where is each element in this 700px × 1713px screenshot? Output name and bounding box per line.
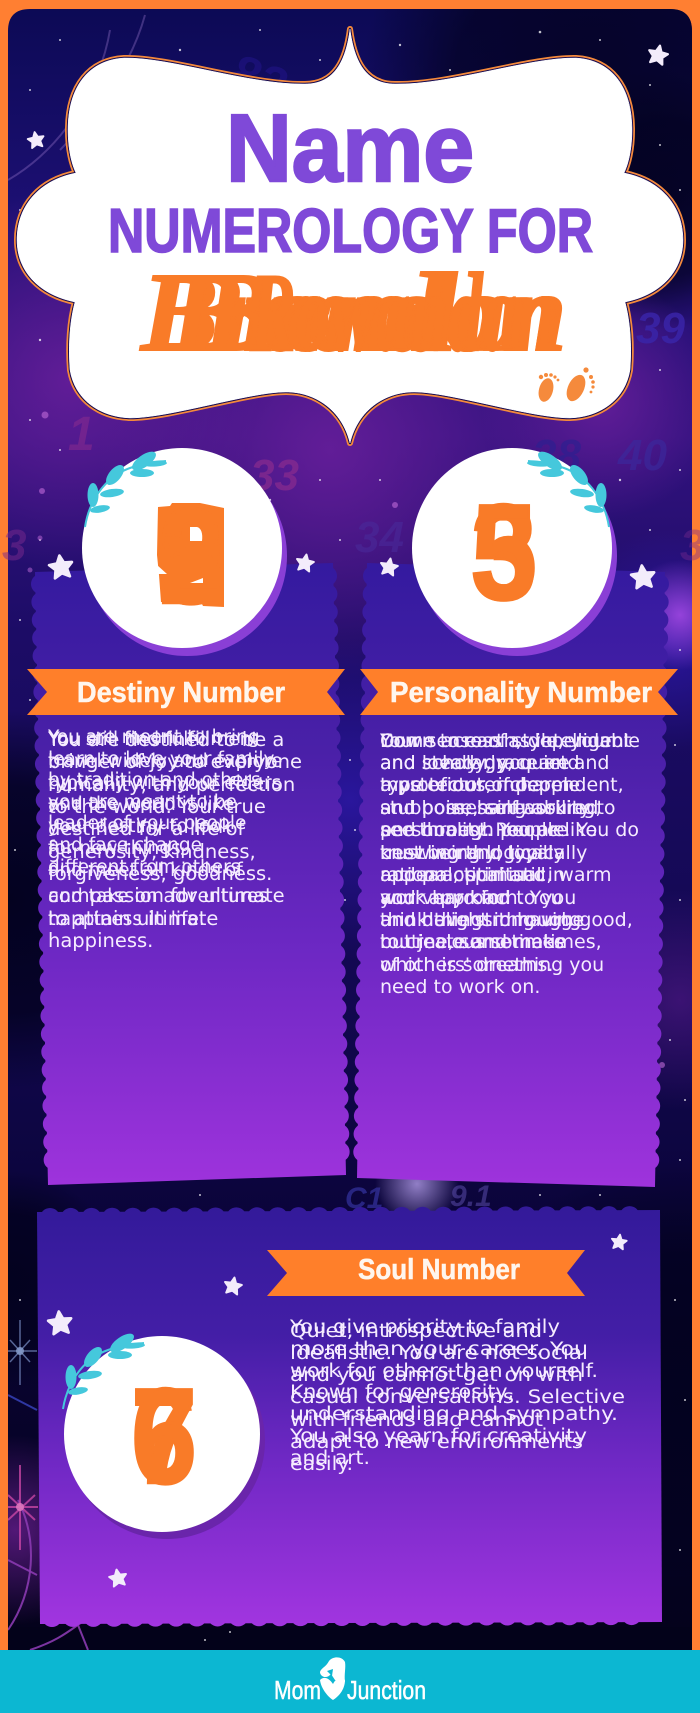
star upper right bbox=[611, 1234, 627, 1250]
overlapping destiny text: You are meant to bring bbox=[47, 727, 260, 748]
overlapping destiny text: and face change bbox=[48, 835, 202, 856]
overlapping baby names: Brennan bbox=[170, 251, 562, 375]
overlapping personality text: need to work on. bbox=[380, 976, 540, 998]
overlapping soul text bbox=[289, 1317, 625, 1475]
ribbon: personality number bbox=[360, 669, 678, 715]
icon: baby footprints bbox=[536, 367, 595, 404]
overlapping soul text: Known for generosity, bbox=[290, 1382, 514, 1403]
logo wordmark bbox=[274, 1675, 426, 1705]
faint background numerals bbox=[2, 43, 700, 1215]
overlapping personality text: type of outer charm bbox=[380, 774, 570, 796]
panel: personality number bbox=[357, 448, 678, 1187]
star: title right bbox=[647, 44, 669, 65]
overlapping personality text: a protector of people bbox=[380, 774, 580, 796]
panel background bbox=[35, 563, 346, 1185]
overlapping personality text: but jealous sometimes, bbox=[380, 931, 602, 953]
plaque outline bbox=[17, 29, 683, 443]
overlapping personality text: best being logically bbox=[380, 842, 564, 864]
panel: soul number bbox=[37, 1210, 662, 1624]
overlapping destiny text: and the world is like bbox=[48, 794, 234, 815]
panel: destiny number bbox=[27, 448, 346, 1185]
star upper middle bbox=[223, 1276, 243, 1295]
overlapping destiny text: different from others bbox=[48, 857, 240, 878]
overlapping soul digits: 6 bbox=[131, 1360, 197, 1512]
overlapping destiny text bbox=[47, 727, 302, 952]
icon: leaf branch bbox=[63, 1330, 145, 1409]
overlapping destiny text: typically with your elders bbox=[48, 773, 281, 794]
overlapping destiny text: You still find fulfillment bbox=[47, 729, 259, 750]
icon: leaf branch bbox=[85, 448, 167, 527]
faint background numerals: 3 bbox=[2, 521, 26, 570]
overlapping personality text: and lovely grace and bbox=[380, 752, 580, 774]
overlapping personality text: see through people. You do bbox=[380, 819, 639, 841]
overlapping personality text: work hard for bbox=[380, 887, 508, 909]
logo wordmark: Mom bbox=[274, 1675, 321, 1705]
icon: mother and child logo bbox=[320, 1657, 345, 1700]
title: Name: Name bbox=[226, 95, 474, 202]
overlapping soul text: work for others than yourself. bbox=[290, 1361, 598, 1382]
overlapping personality text: Your sense of style, your bbox=[379, 730, 613, 752]
overlapping personality text: of others' dreams. bbox=[380, 954, 553, 976]
overlapping soul text: understanding and sympathy. bbox=[290, 1404, 618, 1425]
number circle bbox=[82, 448, 287, 656]
overlapping destiny text: happiness in life. bbox=[48, 909, 205, 930]
overlapping destiny text: leader of your people bbox=[48, 813, 246, 834]
overlapping personality text: routine, sometimes bbox=[380, 931, 564, 953]
overlapping soul text: Quiet, introspective and bbox=[290, 1321, 542, 1342]
overlapping personality text: and delight in having bbox=[380, 909, 581, 931]
overlapping personality text: which is something you bbox=[380, 954, 604, 976]
overlapping personality text: Down to earth, dependable bbox=[380, 730, 640, 752]
overlapping destiny text: by tradition and others bbox=[48, 770, 261, 791]
overlapping personality text: trust worthy, loyal bbox=[380, 842, 554, 864]
overlapping personality text: think things through good, bbox=[380, 909, 633, 931]
overlapping destiny text: happiness. bbox=[48, 929, 153, 952]
faint background numerals: 38 bbox=[532, 431, 581, 480]
overlapping personality digits: 3 bbox=[471, 476, 537, 628]
ribbon: destiny number bbox=[27, 669, 345, 715]
overlapping personality text: to create and make bbox=[380, 931, 565, 953]
star right bbox=[630, 564, 656, 588]
overlapping personality text: Come across as intelligent bbox=[380, 730, 631, 752]
overlapping destiny text: You are destined to be a bbox=[47, 728, 284, 751]
overlapping personality text: and have strong urge bbox=[380, 909, 584, 931]
faint background numerals: 1 bbox=[68, 408, 95, 461]
ribbon: soul number: Soul Number bbox=[358, 1254, 520, 1286]
overlapping destiny text: bringer of joy to everyone bbox=[48, 750, 302, 773]
overlapping personality text: stubborn, hardworking, bbox=[380, 797, 601, 819]
overlapping personality text bbox=[379, 730, 640, 998]
overlapping personality text: and practical and bbox=[380, 864, 546, 886]
overlapping destiny text: you are meant to be bbox=[48, 792, 237, 813]
overlapping personality text: and steady, you are bbox=[380, 752, 570, 774]
overlapping personality text: and possessing ability to bbox=[380, 797, 616, 819]
overlapping destiny text: destined for a life of bbox=[48, 817, 246, 840]
overlapping soul text: You also yearn for creativity bbox=[289, 1426, 587, 1447]
overlapping soul text: with friends and cannot bbox=[290, 1410, 543, 1431]
overlapping destiny digits: 2 bbox=[159, 480, 223, 632]
overlapping personality text: and scholarly, quiet and bbox=[380, 752, 609, 774]
ribbon: personality number: Personality Number bbox=[390, 677, 652, 709]
faint background numerals: 40 bbox=[617, 431, 667, 480]
icon: leaf branch bbox=[527, 448, 609, 527]
title: Numerology for: NUMEROLOGY FOR bbox=[108, 197, 593, 266]
overlapping personality text: and honest. You are bbox=[380, 819, 568, 841]
overlapping destiny text: and take on adventures bbox=[48, 886, 268, 907]
overlapping personality text: and very kind to you bbox=[380, 887, 576, 909]
number circle bbox=[412, 448, 617, 656]
overlapping soul text: idealistic. You are not social bbox=[290, 1343, 588, 1364]
title plaque bbox=[17, 29, 683, 443]
overlapping personality text: appear optimistic, warm bbox=[380, 864, 611, 886]
plaque dark edge bbox=[17, 29, 683, 443]
faint background numerals: C1 bbox=[345, 1182, 383, 1215]
overlapping personality text: and poise, self-assured bbox=[380, 797, 598, 819]
plaque white fill bbox=[17, 29, 683, 443]
overlapping destiny text: and meet all kinds of bbox=[48, 860, 243, 881]
overlapping soul text: more than your career. You bbox=[290, 1339, 588, 1360]
number circle bbox=[64, 1336, 265, 1539]
faint background numerals: 34 bbox=[355, 513, 404, 562]
faint background numerals: 9.1 bbox=[450, 1180, 492, 1213]
star right bbox=[295, 553, 315, 572]
overlapping personality digits: 5 bbox=[471, 476, 537, 628]
panel background bbox=[37, 1210, 662, 1624]
overlapping destiny digits: 8 bbox=[159, 480, 223, 632]
overlapping soul text: adapt to new environments bbox=[290, 1432, 583, 1453]
ribbon: soul number bbox=[267, 1250, 585, 1296]
overlapping soul text: easily. bbox=[290, 1454, 353, 1475]
overlapping personality text: knowing and typically bbox=[380, 842, 587, 864]
faint background numerals: 33 bbox=[250, 451, 299, 500]
nebula arcs and flares bbox=[8, 1320, 88, 1650]
star left bbox=[379, 557, 399, 576]
star lower bbox=[108, 1568, 128, 1587]
overlapping personality text: personality. People like bbox=[380, 819, 597, 841]
overlapping destiny text: for new things bbox=[48, 838, 181, 859]
overlapping personality text: your approach. You bbox=[380, 887, 563, 909]
overlapping destiny text: humanity, and perfection bbox=[48, 773, 295, 796]
overlapping destiny text: generosity, kindness, bbox=[48, 840, 256, 863]
overlapping destiny text: forgiveness, goodness. bbox=[48, 862, 272, 885]
overlapping soul digits: 7 bbox=[131, 1360, 197, 1512]
overlapping baby names: Brendan bbox=[203, 251, 560, 375]
overlapping destiny text: to attain ultimate bbox=[48, 907, 218, 930]
overlapping destiny text: travel widely and explore bbox=[48, 751, 282, 772]
logo wordmark: Junction bbox=[347, 1675, 426, 1705]
overlapping baby names: Brandon bbox=[139, 251, 567, 375]
star upper left bbox=[47, 1310, 73, 1334]
overlapping destiny digits: 9 bbox=[159, 480, 223, 632]
footer band bbox=[0, 1650, 700, 1713]
panel background bbox=[357, 563, 665, 1187]
overlapping destiny text: compassion for ultimate bbox=[48, 884, 285, 907]
star: title left bbox=[27, 131, 45, 148]
overlapping destiny text: learn to love your family bbox=[48, 749, 274, 770]
overlapping soul text: casual conversations. Selective bbox=[290, 1387, 625, 1408]
overlapping personality text: mysterious, independent, bbox=[380, 774, 624, 796]
overlapping destiny text: to the world. Your true bbox=[48, 795, 266, 818]
faint background numerals: 83 bbox=[222, 43, 294, 114]
overlapping soul text: You give priority to family bbox=[289, 1317, 560, 1338]
overlapping soul text: and art. bbox=[290, 1448, 370, 1469]
faint background numerals: 39 bbox=[636, 304, 685, 353]
star left bbox=[48, 554, 74, 579]
overlapping personality text: rational, spiritual in bbox=[380, 864, 565, 886]
overlapping destiny text: your destiny to look bbox=[48, 816, 232, 837]
overlapping soul text: and you cannot get on with bbox=[290, 1365, 583, 1386]
ribbon: destiny number: Destiny Number bbox=[77, 677, 285, 709]
